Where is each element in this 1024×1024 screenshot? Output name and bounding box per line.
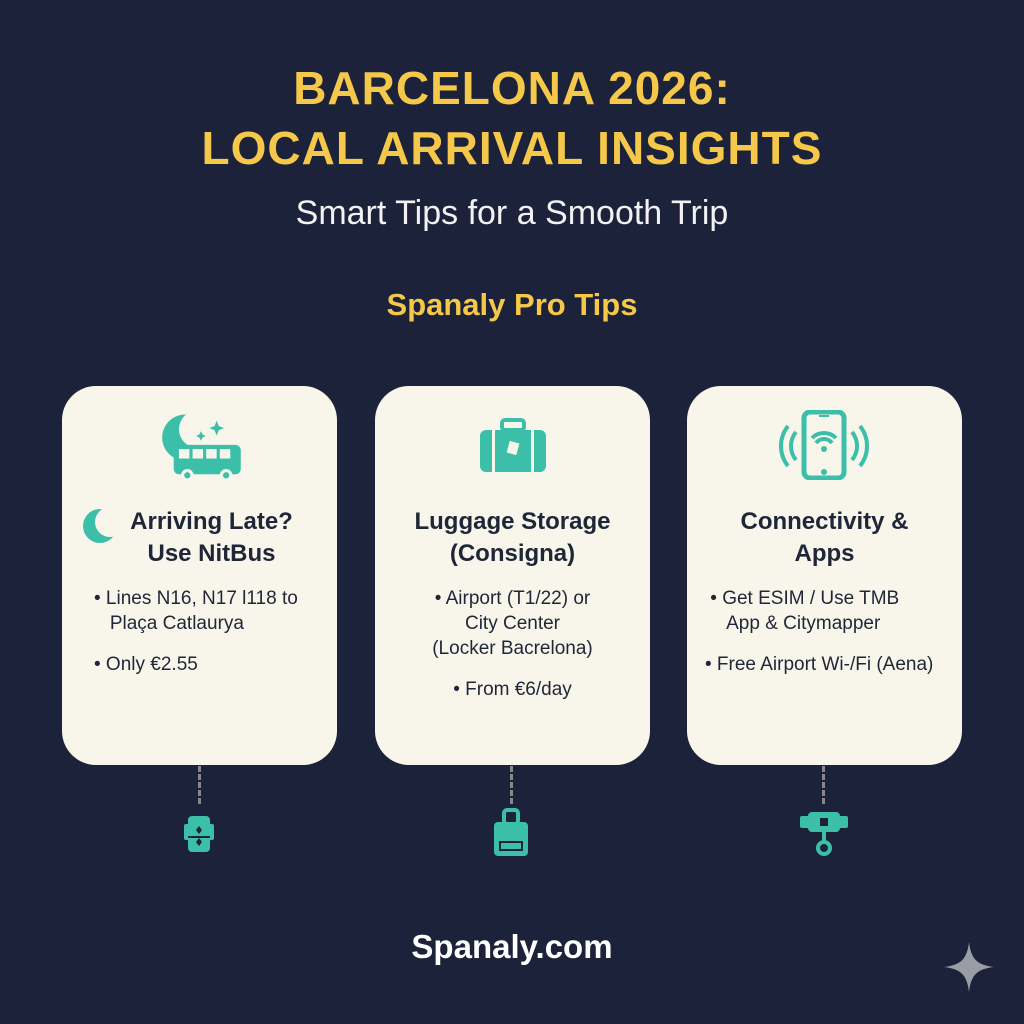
bullets: • Only €2.55 [94, 654, 198, 675]
bullets: • Lines N16, N17 l118 to [94, 588, 298, 609]
bullets: City Center [465, 613, 560, 634]
heading: Connectivity & [740, 508, 909, 535]
title: LOCAL ARRIVAL INSIGHTS [202, 122, 822, 174]
icon: moon [83, 509, 114, 543]
heading: (Consigna) [450, 540, 575, 567]
footer: Spanaly.com [411, 928, 613, 965]
icon: bag [494, 808, 528, 856]
icon: phone wifi [779, 410, 869, 480]
heading [130, 508, 293, 567]
section heading: Spanaly Pro Tips [387, 287, 637, 322]
icon: suitcase [480, 418, 546, 472]
bullets: • From €6/day [453, 679, 572, 700]
bullets [94, 588, 298, 675]
heading: Luggage Storage [414, 508, 611, 535]
icon: transit card [184, 816, 214, 852]
title [202, 62, 822, 174]
panel: connectivity [687, 386, 962, 765]
bullets: • Free Airport Wi-/Fi (Aena) [705, 654, 933, 675]
bullets: Plaça Catlaurya [110, 613, 244, 634]
heading: Use NitBus [147, 540, 276, 567]
icon: night bus [162, 414, 241, 478]
panel: arriving late [62, 386, 337, 765]
bullets: • Get ESIM / Use TMB [710, 588, 899, 609]
panel: luggage [375, 386, 650, 765]
bullets: (Locker Bacrelona) [432, 638, 593, 659]
bullets: • Airport (T1/22) or [435, 588, 590, 609]
bullets: App & Citymapper [726, 613, 880, 634]
heading [740, 508, 909, 567]
title: BARCELONA 2026: [293, 62, 731, 114]
bullets [432, 588, 593, 700]
heading: Arriving Late? [130, 508, 293, 535]
heading: Apps [794, 540, 854, 567]
heading [414, 508, 611, 567]
icon: adapter [800, 812, 848, 856]
icon: sparkle [944, 942, 994, 992]
bullets [705, 588, 933, 675]
subtitle: Smart Tips for a Smooth Trip [296, 194, 728, 232]
